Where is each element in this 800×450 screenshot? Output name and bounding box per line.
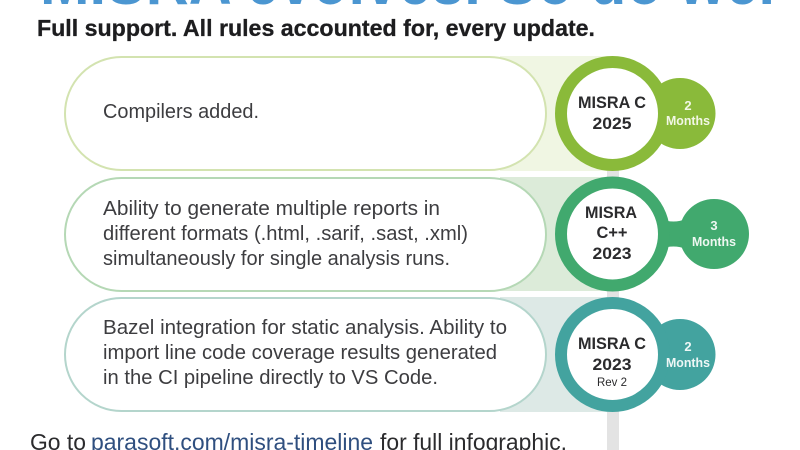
subtitle: Full support. All rules accounted for, every update. (37, 15, 595, 41)
version ring: MISRA C 2025: 2025 (592, 114, 632, 133)
version ring: MISRA C 2023 Rev 2: 2023 (592, 355, 632, 374)
description text: Bazel integration for static analysis. Ability to (103, 316, 507, 339)
panel background band (500, 56, 612, 171)
duration bubble: 3 months: Months (692, 234, 736, 249)
description text: import line code coverage results generated (103, 341, 497, 364)
panel: MISRA C 2023 Rev 2 (65, 297, 716, 412)
duration bubble: 3 months (660, 199, 749, 269)
duration label: 2 months: 2 (684, 98, 692, 113)
version ring: MISRA C++ 2023: C++ (596, 223, 628, 242)
footer call to action (30, 429, 567, 450)
version ring: MISRA C 2023 Rev 2: MISRA C (578, 334, 646, 353)
description text: different formats (.html, .sarif, .sast, .xml) (103, 222, 468, 245)
duration label: 2 months (666, 98, 710, 128)
version ring: MISRA C 2023 Rev 2 (561, 303, 664, 406)
description text: Compilers added. (103, 100, 259, 123)
description text: in the CI pipeline directly to VS Code. (103, 366, 438, 389)
duration bubble (644, 319, 716, 390)
duration label: 2 months: Months (666, 355, 710, 370)
panel: MISRA C 2025 (65, 56, 716, 171)
panel background band (500, 297, 612, 412)
description pill (65, 298, 546, 411)
version ring: MISRA C++ 2023: 2023 (592, 244, 632, 263)
description text (103, 316, 507, 389)
duration label: 2 months: Months (666, 113, 710, 128)
timeline vertical bar (607, 170, 619, 450)
panel: MISRA C++ 2023 (65, 177, 749, 291)
duration bubble: 3 months: 3 (710, 218, 718, 233)
description pill (65, 57, 546, 170)
duration bubble (644, 78, 716, 149)
version ring: MISRA C++ 2023 (561, 182, 664, 286)
version ring: MISRA C 2025 (561, 62, 664, 165)
version ring: MISRA C++ 2023: MISRA (585, 203, 637, 222)
version ring: MISRA C 2025: MISRA C (578, 93, 646, 112)
version ring: MISRA C 2023 Rev 2: Rev 2 (597, 375, 627, 389)
description pill (65, 178, 546, 291)
description text: simultaneously for single analysis runs. (103, 247, 450, 270)
description text: Ability to generate multiple reports in (103, 197, 440, 220)
panel background band (500, 177, 612, 291)
duration label: 2 months (666, 339, 710, 370)
description text (103, 197, 468, 270)
duration label: 2 months: 2 (684, 339, 692, 354)
